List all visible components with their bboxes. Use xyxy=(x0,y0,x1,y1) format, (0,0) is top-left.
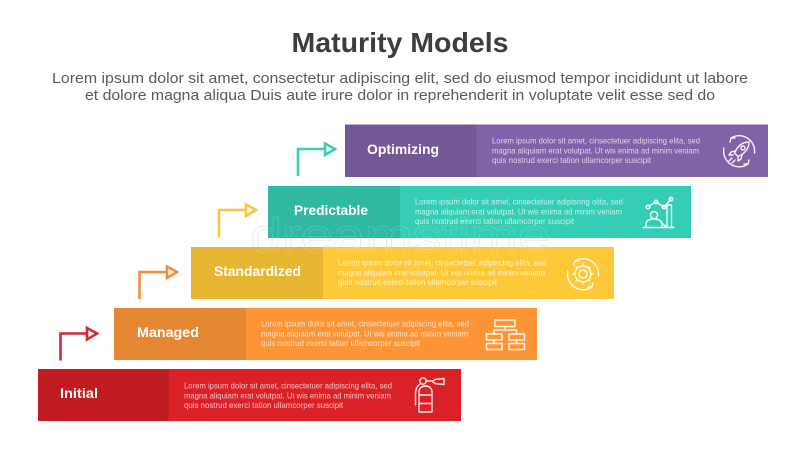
step 3: standardized xyxy=(191,247,614,299)
step 1: initial: Lorem ipsum dolor sit amet, cinsectetuer adipiscing elita, sed xyxy=(184,380,392,390)
watermark on bars xyxy=(250,198,550,263)
step 5: optimizing: quis nostrud exerci tation ullamcorper suscipit xyxy=(492,155,652,165)
icon: chart xyxy=(643,197,674,228)
icon: org chart xyxy=(486,320,524,350)
step 1: initial: quis nostrud exerci tation ullamcorper suscipit xyxy=(184,400,344,410)
step 2: managed: quis nostrud exerci tation ullamcorper suscipit xyxy=(261,338,421,348)
step 2: managed: Managed xyxy=(137,324,199,340)
arrow: initial to managed xyxy=(60,328,97,360)
step 4: predictable: Predictable xyxy=(294,202,368,218)
step 4: predictable: Lorem ipsum dolor sit amet, cinsectetuer adipisong olita, sed xyxy=(415,196,623,206)
icon: gear xyxy=(568,259,599,290)
watermark on background: dreamstime xyxy=(250,210,550,263)
arrow: standardized to predictable xyxy=(219,204,256,238)
step 2: managed: magna aliquiam erat volutpat. Ut wis enima ad minim veniam xyxy=(261,328,468,338)
step 4: predictable: magna aliquiam erat volutpat. Ut wis enima ad minim veniam xyxy=(415,206,622,216)
step 3: standardized: magna aliquiam erat volutpat. Ut wis enima ad minim veniam xyxy=(338,268,545,278)
title: Maturity Models xyxy=(292,27,508,58)
step 3: standardized: quis nostrud exerci tation ullamcorper suscipit xyxy=(338,277,498,287)
step 4: predictable: quis nostrud exerci tation ullamcorper suscipit xyxy=(415,216,575,226)
subtitle: et dolore magna aliqua Duis aute irure dolor in reprehenderit in voluptate velit esse sed do xyxy=(85,87,715,104)
icon: fire extinguisher xyxy=(416,378,444,412)
step 4: predictable xyxy=(268,186,691,238)
step 2: managed: Lorem ipsum dolor sit amet, cinsectetuer adipiscing elita, sed xyxy=(261,318,469,328)
arrow: managed to standardized xyxy=(140,266,177,299)
subtitle: Lorem ipsum dolor sit amet, consectetur adipiscing elit, sed do eiusmod tempor incididunt ut labore xyxy=(52,70,748,87)
arrow: predictable to optimizing xyxy=(298,144,335,176)
step 5: optimizing: magna aliquiam erat volutpat. Ut wis enima ad minim veniam xyxy=(492,146,699,156)
step 3: standardized: Standardized xyxy=(214,263,301,279)
watermark on bars: dreamstime xyxy=(250,210,550,263)
icon: rocket xyxy=(724,136,755,167)
step 3: standardized: Lorem ipsum dolor sit amet, cinsectetuer adipiscing elita, sed xyxy=(338,258,546,268)
step 5: optimizing: Lorem ipsum dolor sit amet, cinsectetuer adipiscing elita, sed xyxy=(492,136,700,146)
subtitle xyxy=(52,70,748,104)
step 2: managed xyxy=(114,308,537,360)
step 5: optimizing: Optimizing xyxy=(367,141,439,157)
step 1: initial xyxy=(38,369,461,421)
step 5: optimizing xyxy=(345,124,768,177)
step 1: initial: magna aliquiam erat volutpat. Ut wis enima ad minim veniam xyxy=(184,390,391,400)
step 1: initial: Initial xyxy=(60,385,98,401)
